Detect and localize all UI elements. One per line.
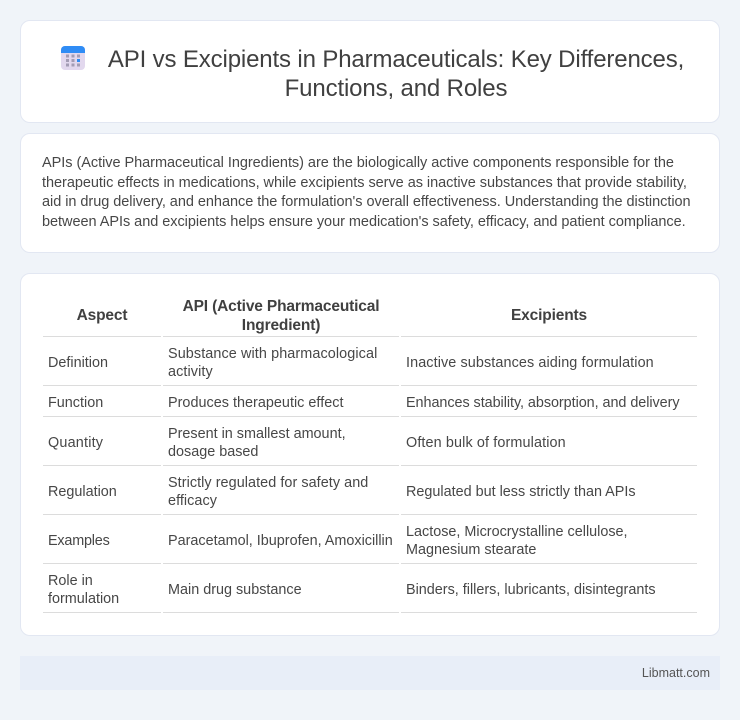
footer text: Libmatt.com <box>642 666 710 680</box>
title: Functions, and Roles <box>285 74 507 102</box>
row: Definition: Inactive substances aiding formulation <box>406 355 654 371</box>
row: Definition: Substance with pharmacological <box>168 346 377 362</box>
icon: calendar <box>61 46 85 70</box>
row: Quantity: Quantity <box>48 435 103 451</box>
footer <box>20 656 720 690</box>
row: Role in formulation: Binders, fillers, lubricants, disintegrants <box>406 582 656 598</box>
table header: API <box>183 298 379 334</box>
row: Quantity <box>48 426 566 460</box>
row: Function <box>48 395 680 411</box>
row: Regulation: Regulated but less strictly than APIs <box>406 484 636 500</box>
panel: comparison table <box>20 273 720 636</box>
intro text: aid in drug delivery, and enhance the formulation's overall effectiveness. Understanding the distinction <box>42 194 691 210</box>
row: Role in formulation: Role in <box>48 573 93 589</box>
header panel <box>20 20 720 123</box>
row: Regulation: Strictly regulated for safety and <box>168 475 368 491</box>
intro text: therapeutic effects in medications, while excipients serve as inactive substances that provide stability, <box>42 174 687 190</box>
table header: API: Ingredient) <box>242 317 320 334</box>
row: Regulation: Regulation <box>48 484 117 500</box>
table header: API: API (Active Pharmaceutical <box>183 298 379 315</box>
row: Quantity: Present in smallest amount, <box>168 426 346 442</box>
row: Regulation: efficacy <box>168 493 217 509</box>
row: Function: Produces therapeutic effect <box>168 395 343 411</box>
table header: Excipients: Excipients <box>511 307 587 324</box>
row: Examples: Examples <box>48 533 110 549</box>
row: Regulation <box>48 475 636 509</box>
row: Role in formulation <box>48 573 656 607</box>
table header: Aspect: Aspect <box>77 307 127 324</box>
row: Examples: Paracetamol, Ibuprofen, Amoxicillin <box>168 533 393 549</box>
row: Function: Function <box>48 395 103 411</box>
row: Definition <box>48 346 654 380</box>
row: Definition: Definition <box>48 355 108 371</box>
row: Quantity: dosage based <box>168 444 258 460</box>
intro text: APIs (Active Pharmaceutical Ingredients) are the biologically active components responsible for the <box>42 155 674 171</box>
intro panel <box>20 133 720 253</box>
row: Examples: Magnesium stearate <box>406 542 536 558</box>
row: Role in formulation: Main drug substance <box>168 582 302 598</box>
row: Examples <box>48 524 628 558</box>
row: Quantity: Often bulk of formulation <box>406 435 566 451</box>
row: Role in formulation: formulation <box>48 591 119 607</box>
title: API vs Excipients in Pharmaceuticals: Key Differences, <box>108 46 684 72</box>
row: Function: Enhances stability, absorption, and delivery <box>406 395 680 411</box>
row: Examples: Lactose, Microcrystalline cellulose, <box>406 524 628 540</box>
row: Definition: activity <box>168 364 213 380</box>
intro text: between APIs and excipients helps ensure your medication's safety, efficacy, and patient compliance. <box>42 214 686 230</box>
intro text <box>42 155 691 230</box>
title <box>108 46 684 102</box>
